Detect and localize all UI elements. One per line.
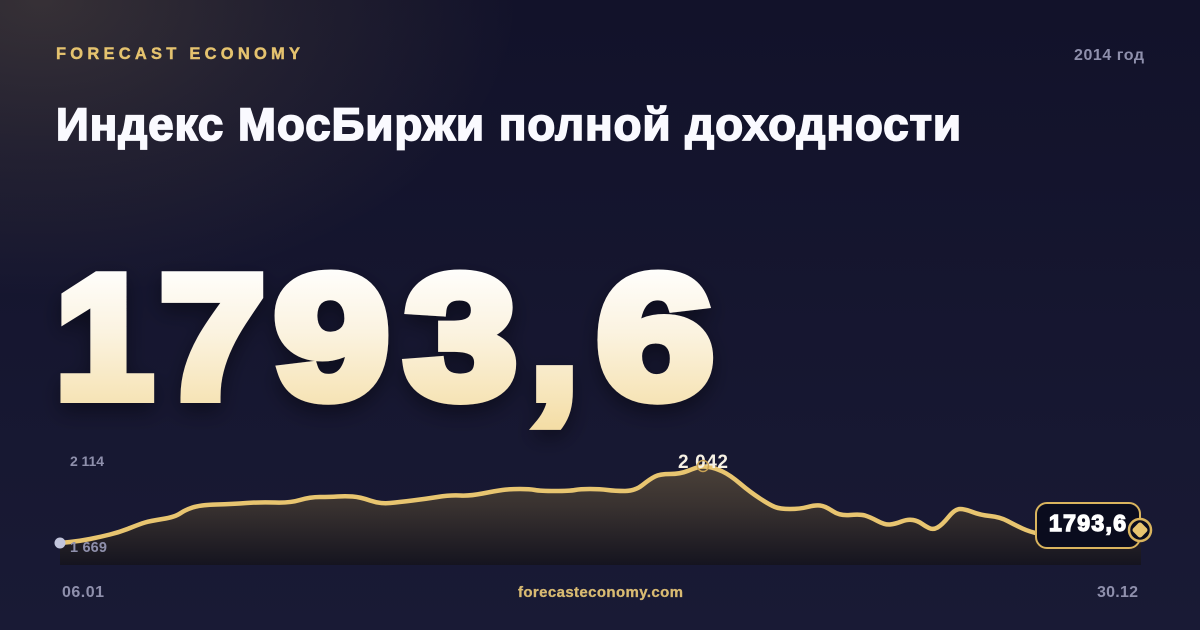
latest value callout xyxy=(1036,503,1140,548)
axis max label: 2 114 xyxy=(70,453,104,469)
line chart xyxy=(54,452,1151,565)
peak marker xyxy=(698,460,708,472)
chart area fill xyxy=(60,466,1141,565)
headline value: 9 xyxy=(274,239,389,434)
headline value: 1 xyxy=(56,239,153,434)
title: Индекс МосБиржи полной доходности xyxy=(56,99,961,150)
headline value: 6 xyxy=(597,239,714,434)
peak value label: 2 042 xyxy=(678,452,728,473)
axis min label: 1 669 xyxy=(70,540,107,556)
chart line xyxy=(60,466,1040,543)
latest value callout: 1793,6 xyxy=(1049,510,1126,536)
latest point marker xyxy=(1129,519,1151,541)
end date: 30.12 xyxy=(1097,584,1138,601)
year label: 2014 год xyxy=(1074,47,1144,64)
website: forecasteconomy.com xyxy=(518,584,683,601)
headline value: , xyxy=(530,239,578,434)
headline value: 3 xyxy=(405,239,516,434)
brand label: FORECAST ECONOMY xyxy=(56,45,300,63)
start date: 06.01 xyxy=(62,584,104,601)
start point marker xyxy=(54,538,66,548)
headline value: 7 xyxy=(160,239,265,434)
